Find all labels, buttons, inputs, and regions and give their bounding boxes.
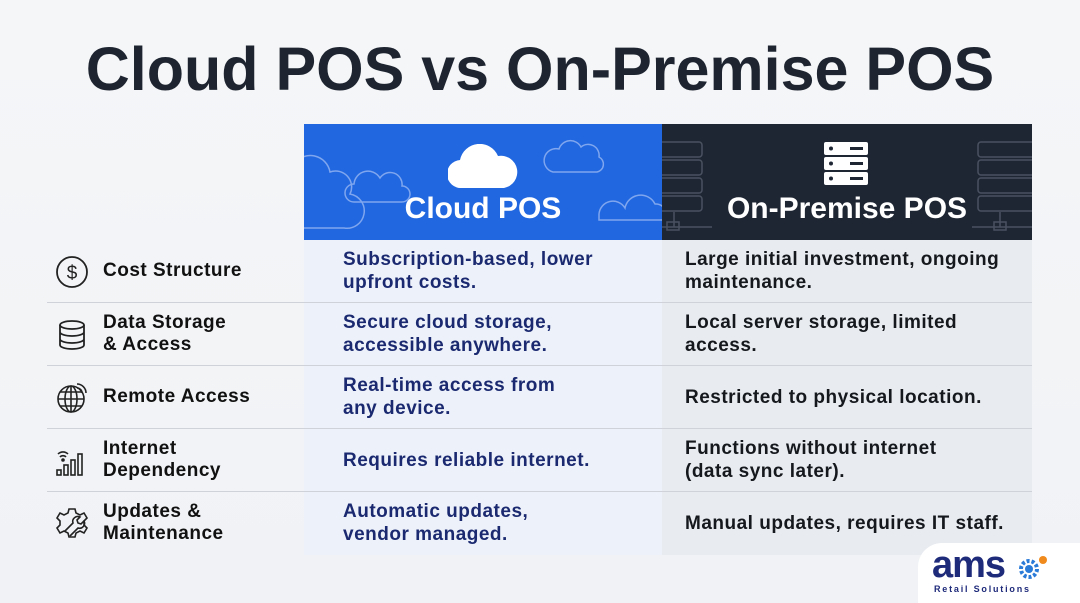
row: cost structure: maintenance. bbox=[685, 272, 812, 293]
row: data storage: Data Storage bbox=[103, 312, 226, 333]
header: cloud pos: Cloud POS bbox=[405, 192, 561, 225]
header: cloud pos bbox=[304, 124, 662, 240]
row: data storage: accessible anywhere. bbox=[343, 335, 547, 356]
icon: dollar bbox=[56, 256, 88, 288]
row: cost structure: Large initial investment, ongoing bbox=[685, 249, 999, 270]
row: updates: vendor managed. bbox=[343, 524, 508, 545]
title: Cloud POS vs On-Premise POS bbox=[86, 35, 994, 103]
icon: gears bbox=[1019, 556, 1047, 579]
row: updates: Manual updates, requires IT staff. bbox=[685, 512, 1004, 534]
logo: ams retail solutions bbox=[918, 543, 1080, 603]
row: cost structure: Cost Structure bbox=[103, 260, 242, 281]
icon: gear wrench bbox=[56, 508, 88, 538]
row: cost structure: Subscription-based, lower bbox=[343, 249, 593, 270]
row: data storage bbox=[47, 303, 1032, 366]
row: internet dependency: Dependency bbox=[103, 460, 221, 481]
row: remote access: Remote Access bbox=[103, 386, 250, 407]
row: updates: Maintenance bbox=[103, 523, 224, 544]
row: remote access bbox=[47, 366, 1032, 429]
icon: cloud bbox=[448, 144, 518, 188]
row: data storage: access. bbox=[685, 335, 757, 356]
row: internet dependency: (data sync later). bbox=[685, 461, 845, 482]
logo: ams retail solutions: Retail Solutions bbox=[934, 584, 1031, 594]
row: data storage: Secure cloud storage, bbox=[343, 312, 552, 333]
icon: globe bbox=[57, 383, 87, 413]
icon: signal bbox=[56, 451, 83, 476]
row: data storage: & Access bbox=[103, 334, 192, 355]
icon: server bbox=[824, 142, 868, 185]
row: remote access: Real-time access from bbox=[343, 375, 555, 396]
logo: ams retail solutions: ams bbox=[932, 544, 1005, 586]
header: on-premise pos: On-Premise POS bbox=[727, 192, 967, 225]
on-premise column background bbox=[662, 240, 1032, 555]
row: internet dependency: Functions without internet bbox=[685, 438, 937, 459]
icon: database bbox=[59, 320, 85, 350]
header: on-premise pos bbox=[662, 124, 1032, 240]
icon: dollar: $ bbox=[67, 263, 78, 284]
row: updates: Updates & bbox=[103, 501, 201, 522]
row: cost structure: upfront costs. bbox=[343, 272, 477, 293]
row: internet dependency: Requires reliable internet. bbox=[343, 450, 590, 470]
row: remote access: any device. bbox=[343, 398, 451, 419]
row: cost structure bbox=[47, 240, 1032, 303]
cloud column background bbox=[304, 240, 662, 555]
row: data storage: Local server storage, limited bbox=[685, 312, 957, 333]
row: internet dependency bbox=[47, 429, 1032, 492]
row: updates bbox=[56, 501, 1004, 545]
row: remote access: Restricted to physical location. bbox=[685, 386, 982, 408]
row: internet dependency: Internet bbox=[103, 438, 177, 459]
row: updates: Automatic updates, bbox=[343, 501, 528, 522]
